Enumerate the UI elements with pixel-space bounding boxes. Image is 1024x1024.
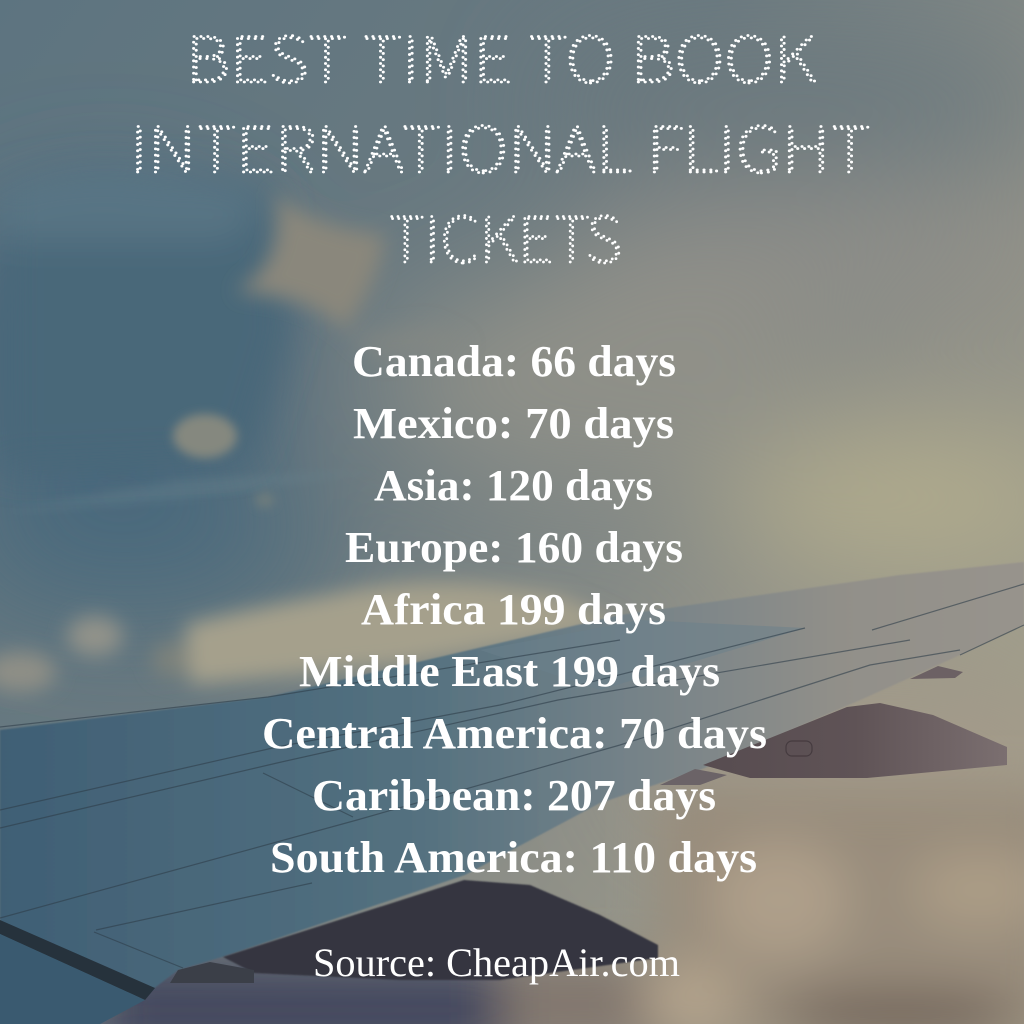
pylon fairing left xyxy=(170,962,254,983)
title: INTERNATIONAL FLIGHT xyxy=(130,100,870,191)
destination list: Mexico: 70 days xyxy=(353,399,674,448)
title: TICKETS xyxy=(388,190,622,281)
destination list: Central America: 70 days xyxy=(262,709,767,758)
destination list: Africa 199 days xyxy=(361,585,666,634)
pylon fairing right xyxy=(910,666,963,679)
engine nacelle right xyxy=(703,703,1007,778)
destination list: Asia: 120 days xyxy=(374,461,653,510)
region below the strip xyxy=(0,934,145,1024)
destination list: Europe: 160 days xyxy=(345,523,683,572)
destination list: South America: 110 days xyxy=(270,833,757,882)
background: lower clouds xyxy=(100,790,1024,1024)
wing leading panel xyxy=(480,620,805,690)
left cloud mass xyxy=(0,169,290,470)
wing-tip dark strip xyxy=(0,920,155,1000)
destination list: Canada: 66 days xyxy=(352,337,676,386)
nacelle porthole xyxy=(786,741,812,756)
title xyxy=(130,10,870,281)
wing panel lines xyxy=(0,584,1024,968)
pylon fairing small xyxy=(660,769,727,785)
wing surface xyxy=(0,562,1024,1024)
wing xyxy=(0,562,1024,1024)
title: BEST TIME TO BOOK xyxy=(186,10,816,101)
destination list xyxy=(262,337,767,882)
engine nacelle left xyxy=(223,880,658,980)
source credit: Source: CheapAir.com xyxy=(313,940,680,985)
destination list: Middle East 199 days xyxy=(299,647,720,696)
destination list: Caribbean: 207 days xyxy=(312,771,716,820)
tan billow xyxy=(235,190,385,330)
